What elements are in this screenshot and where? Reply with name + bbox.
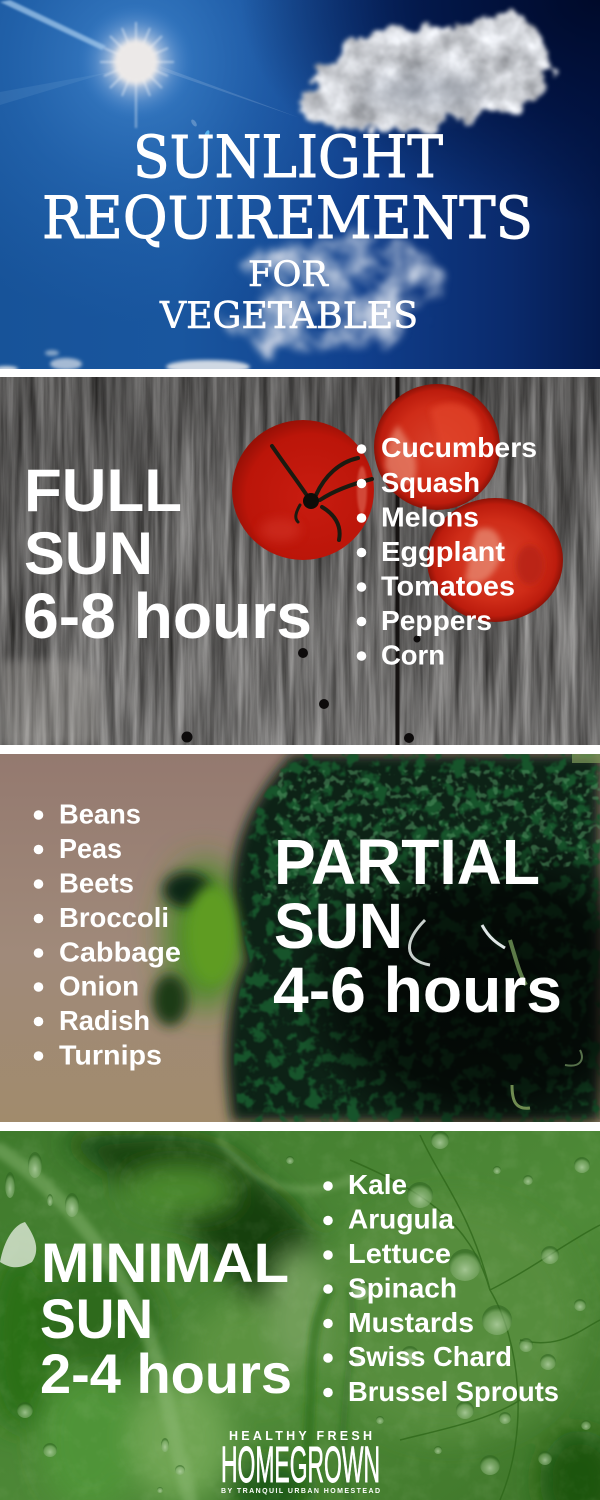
icon: whole tomato [232, 420, 374, 560]
icon: broccoli [152, 754, 600, 1150]
heading: full sun: FULL [24, 457, 182, 524]
list: partial sun vegetables: Peas [59, 833, 122, 864]
list: minimal sun vegetables: Mustards [348, 1307, 474, 1338]
panel: full sun [0, 377, 600, 745]
heading: partial sun: SUN [274, 890, 403, 962]
heading: full sun: SUN [24, 520, 153, 587]
title: SUNLIGHT [133, 123, 443, 191]
heading: minimal sun [42, 1244, 290, 1394]
heading: minimal sun: MINIMAL [41, 1231, 289, 1294]
heading: partial sun: PARTIAL [274, 826, 540, 898]
heading: minimal sun: 2-4 hours [40, 1342, 292, 1405]
panel: minimal sun [0, 1131, 600, 1500]
panel: hero sky [0, 0, 600, 374]
heading: minimal sun: SUN [40, 1287, 153, 1350]
list: minimal sun vegetables: Kale [348, 1169, 407, 1200]
icon: cut tomato top [374, 384, 500, 510]
leaf ridges [0, 1140, 352, 1500]
list: full sun vegetables: Corn [381, 640, 445, 670]
title [42, 123, 533, 337]
list: minimal sun vegetables: Swiss Chard [348, 1341, 512, 1372]
heading: partial sun: 4-6 hours [273, 954, 562, 1026]
heading: full sun [25, 469, 310, 638]
list: minimal sun vegetables: Brussel Sprouts [348, 1376, 559, 1407]
list: full sun vegetables: Melons [381, 502, 479, 532]
droplets [5, 1131, 591, 1493]
icon: sun [0, 0, 300, 138]
list: full sun vegetables: Eggplant [381, 536, 505, 567]
title: REQUIREMENTS [42, 184, 533, 252]
heading: partial sun [274, 840, 560, 1012]
icon: lower cloud [225, 233, 441, 350]
list: minimal sun vegetables: Arugula [348, 1204, 455, 1234]
title: VEGETABLES [159, 296, 418, 337]
list: partial sun vegetables [34, 798, 181, 1070]
list: partial sun vegetables: Radish [59, 1005, 150, 1036]
panel: partial sun [0, 754, 600, 1150]
logo: healthy fresh homegrown [221, 1429, 380, 1495]
icon: large cloud [300, 15, 551, 132]
list: partial sun vegetables: Turnips [59, 1040, 162, 1070]
list: partial sun vegetables: Beets [59, 868, 134, 898]
list: partial sun vegetables: Beans [59, 798, 141, 830]
list: full sun vegetables: Cucumbers [381, 432, 537, 463]
list: full sun vegetables [357, 432, 537, 670]
list: partial sun vegetables: Broccoli [59, 902, 169, 933]
icon: pale leaf curl [0, 1222, 36, 1267]
title: FOR [248, 255, 330, 295]
list: full sun vegetables: Tomatoes [381, 570, 515, 602]
logo: healthy fresh homegrown: HEALTHY FRESH [229, 1429, 372, 1443]
list: partial sun vegetables: Cabbage [59, 936, 181, 968]
list: minimal sun vegetables [323, 1169, 559, 1407]
list: full sun vegetables: Squash [381, 467, 480, 498]
leaf shading [0, 1134, 600, 1500]
list: minimal sun vegetables: Lettuce [348, 1238, 451, 1269]
leaf veins [350, 1135, 600, 1500]
icon: cut tomato bottom [427, 498, 563, 622]
list: minimal sun vegetables: Spinach [348, 1272, 457, 1304]
icon: nail holes [182, 636, 420, 743]
list: partial sun vegetables: Onion [59, 970, 139, 1002]
panel: minimal sun: HOMEGROWN [221, 1436, 380, 1493]
heading: full sun: 6-8 hours [23, 580, 312, 652]
icon: small bottom clouds [0, 350, 250, 374]
list: full sun vegetables: Peppers [381, 605, 492, 636]
logo: healthy fresh homegrown: BY TRANQUIL URBAN HOMESTEAD [221, 1488, 380, 1495]
